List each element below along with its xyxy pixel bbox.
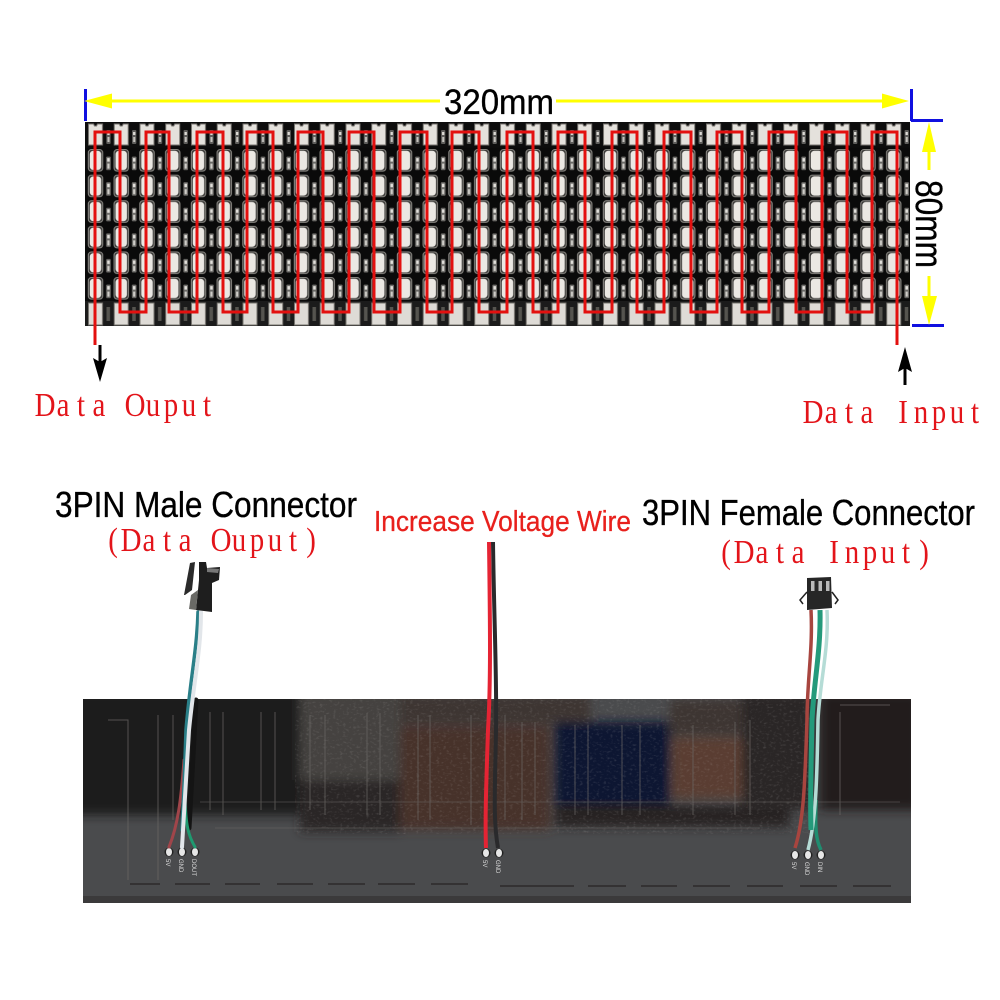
wires: male connector (169, 612, 201, 847)
heading: male connector: 3PIN Male Connector (55, 484, 357, 525)
height dimension: 80mm (907, 119, 949, 327)
width dimension: 320mm: 320mm (444, 83, 554, 122)
wires: female connector (795, 610, 827, 850)
label: data output: Data Ouput (35, 386, 211, 424)
height dimension: 80mm: 80mm (907, 180, 949, 268)
arrow: data input (898, 347, 912, 385)
dashed trace row (130, 884, 891, 886)
data path serpentine line (95, 132, 897, 345)
connector: 3-pin female (800, 577, 838, 610)
solder pads and labels: left: 5V (164, 859, 170, 866)
solder pads and labels: left: GND (177, 859, 183, 873)
connector: 3-pin male (184, 562, 220, 612)
solder pads and labels: left: DOUT (190, 859, 196, 876)
wires: voltage wire (486, 542, 498, 848)
solder pads and labels: middle (481, 848, 504, 874)
subheading: male data output: (Data Ouput) (108, 521, 316, 559)
heading: voltage wire: Increase Voltage Wire (374, 506, 631, 538)
label: data input: Data Input (803, 393, 979, 431)
texture of the film surface (295, 699, 810, 834)
panel: LED matrix back (70, 690, 920, 903)
solder pads and labels: middle: GND (494, 860, 500, 874)
solder pads and labels: right: GND (803, 862, 809, 876)
solder pads and labels: right: DIN (816, 862, 822, 872)
solder pads and labels: middle: 5V (481, 860, 487, 867)
solder pads and labels: right (790, 850, 826, 876)
subheading: female data input: (Data Input) (721, 533, 929, 571)
width dimension: 320mm (84, 83, 913, 122)
solder pads and labels: left (164, 848, 200, 876)
panel: LED matrix front (85, 122, 910, 326)
trace lines on back (108, 705, 900, 880)
solder pads and labels: right: 5V (790, 862, 796, 869)
arrow: data output (93, 345, 107, 382)
